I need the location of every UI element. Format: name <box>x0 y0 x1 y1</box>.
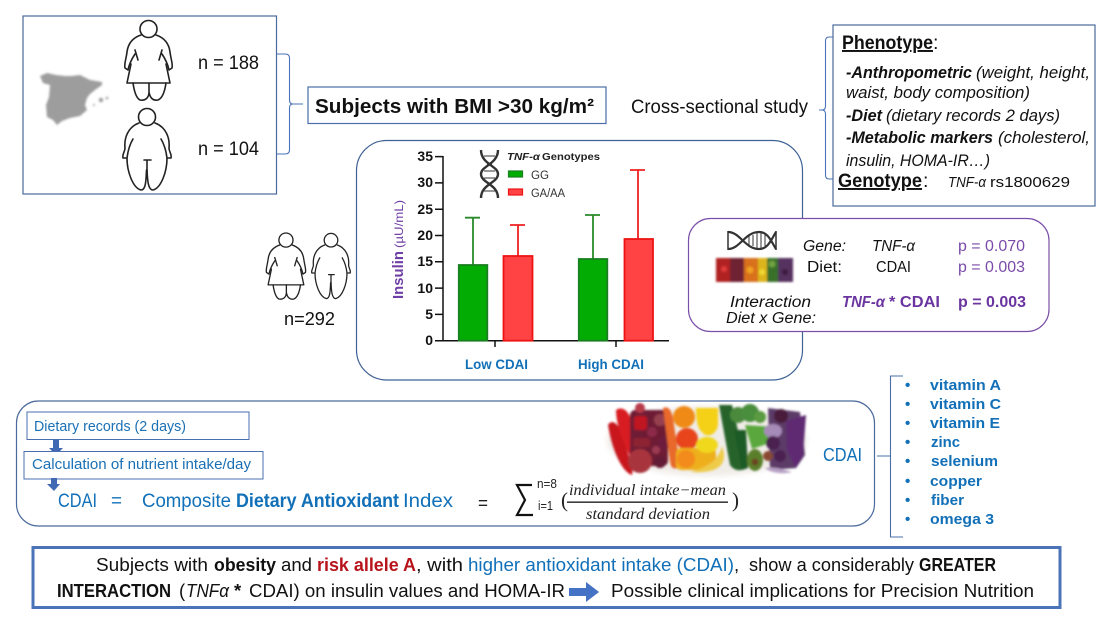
row: diet <box>807 259 1025 276</box>
list: antioxidant components: vitamin E <box>930 415 1000 432</box>
box: dietary records: Dietary records (2 days) <box>34 419 186 435</box>
text: anthropometric: -Anthropometric <box>846 64 972 82</box>
list: antioxidant components: • <box>905 473 910 490</box>
text: CDAI definition: Composite <box>142 490 231 512</box>
label: CDAI: CDAI <box>823 445 862 465</box>
box: subjects with BMI over 30: Subjects with BMI >30 kg/m² <box>315 95 594 118</box>
panel: phenotype and genotype: : <box>933 32 938 54</box>
panel: CDAI calculation <box>16 401 874 526</box>
text: conclusion line 1: higher antioxidant intake (CDAI) <box>468 554 734 575</box>
text: conclusion line 2: ( <box>179 580 186 601</box>
bracket: population to subjects <box>277 54 303 154</box>
text: anthropometric: -Metabolic markers <box>846 129 993 147</box>
box: nutrient intake calculation: Calculation of nutrient intake/day <box>32 457 252 473</box>
formula: ) <box>732 488 739 512</box>
arrow: calculation to CDAI <box>47 478 60 491</box>
y axis with ticks: 15 <box>417 253 433 269</box>
row: interaction <box>726 294 1026 327</box>
box: dietary records <box>27 412 249 440</box>
text: conclusion line 2: * <box>234 580 242 601</box>
x axis labels <box>465 356 644 372</box>
text: conclusion line 1 <box>96 554 996 575</box>
formula <box>478 477 739 523</box>
list: antioxidant components: vitamin C <box>930 396 1001 413</box>
row: interaction: TNF-α <box>842 294 886 311</box>
text: conclusion line 2 <box>57 580 1034 601</box>
arrow: records to calculation <box>49 440 63 455</box>
list: antioxidant components <box>905 377 1001 528</box>
text: anthropometric <box>846 64 1090 170</box>
y axis with ticks: 35 <box>417 148 433 164</box>
row: interaction: Interaction <box>730 294 811 311</box>
list: antioxidant components: • <box>905 453 910 470</box>
row: gene: p = 0.070 <box>958 238 1025 255</box>
icon: horizontal DNA <box>728 231 776 250</box>
list: antioxidant components: zinc <box>931 434 960 451</box>
x axis labels: Low CDAI <box>465 356 528 372</box>
text: anthropometric: insulin, HOMA-IR…) <box>846 152 990 170</box>
text: conclusion line 2: TNFα <box>186 580 229 601</box>
text: conclusion line 1: Subjects with <box>96 554 208 575</box>
text: CDAI definition: CDAI <box>58 490 97 512</box>
row: interaction: p = 0.003 <box>958 294 1026 311</box>
list: antioxidant components: fiber <box>931 492 964 509</box>
legend <box>507 151 600 200</box>
text: CDAI definition <box>58 490 453 512</box>
panel: phenotype and genotype: : <box>923 170 928 192</box>
text: CDAI definition: Dietary Antioxidant <box>236 490 399 512</box>
row: gene: Gene: <box>803 238 846 255</box>
text: TNF-alpha SNP <box>948 174 1070 191</box>
text: conclusion line 1: , <box>734 554 739 575</box>
box: nutrient intake calculation <box>24 452 263 479</box>
text: anthropometric: waist, body composition) <box>846 84 1030 102</box>
text: CDAI definition: = <box>111 490 122 512</box>
list: antioxidant components: • <box>905 511 910 528</box>
text: TNF-alpha SNP: TNF-α <box>948 174 986 191</box>
panel: insulin bar chart <box>356 140 802 380</box>
text: study type: Cross-sectional study <box>631 97 808 118</box>
row: gene: TNF-α <box>872 238 916 255</box>
y axis with ticks: 10 <box>417 280 433 296</box>
bracket: study to phenotype and genotype <box>819 37 838 179</box>
legend: Genotypes <box>542 151 600 163</box>
formula: n=8 <box>537 477 557 491</box>
heading: phenotype: Phenotype <box>842 32 933 54</box>
legend: TNF-α <box>507 151 541 163</box>
bracket: CDAI components <box>877 376 903 537</box>
icon: woman with obesity <box>125 20 172 100</box>
legend: GA/AA <box>531 188 565 200</box>
formula: = <box>478 493 488 513</box>
box: subjects with BMI over 30 <box>308 87 606 124</box>
text: anthropometric: (cholesterol, <box>998 129 1090 147</box>
list: antioxidant components: vitamin A <box>930 377 1001 394</box>
icon: map of Spain <box>40 73 108 125</box>
row: diet: CDAI <box>876 259 911 276</box>
y axis with ticks: 0 <box>425 332 433 348</box>
text: conclusion line 2: INTERACTION <box>57 580 171 601</box>
y axis label <box>390 200 407 299</box>
text: conclusion line 1: show a considerably <box>749 554 915 575</box>
y axis label: Insulin <box>390 251 407 299</box>
panel: gene-diet interaction statistics <box>688 218 1049 332</box>
icon: DNA helix <box>481 150 498 198</box>
row: diet: p = 0.003 <box>958 259 1025 276</box>
icon: food strip <box>716 258 793 282</box>
text: conclusion line 1: GREATER <box>919 554 996 575</box>
text: anthropometric: (dietary records 2 days) <box>886 107 1060 125</box>
y axis with ticks <box>417 148 669 348</box>
list: antioxidant components: • <box>905 377 910 394</box>
text: conclusion line 2: Possible clinical implications for Precision Nutrition <box>611 580 1034 601</box>
panel: study population <box>23 16 276 194</box>
panel: phenotype and genotype <box>833 25 1095 206</box>
row: gene <box>803 238 1025 255</box>
icon: man with obesity <box>123 108 171 190</box>
text: CDAI definition: Index <box>403 490 453 512</box>
panel: conclusion <box>33 548 1060 608</box>
text: conclusion line 1: , with <box>416 554 463 575</box>
list: antioxidant components: • <box>905 434 910 451</box>
text: conclusion line 2: CDAI) on insulin values and HOMA-IR <box>249 580 565 601</box>
row: diet: Diet: <box>807 259 842 276</box>
row: interaction: * CDAI <box>889 294 940 311</box>
heading: genotype: Genotype <box>838 170 922 192</box>
text: TNF-alpha SNP: rs1800629 <box>990 174 1070 191</box>
bars: low CDAI <box>459 218 532 341</box>
legend: GG <box>531 170 549 182</box>
label: men count: n = 104 <box>198 138 259 160</box>
y axis with ticks: 30 <box>417 174 433 190</box>
list: antioxidant components: omega 3 <box>930 511 994 528</box>
label: total subjects: n=292 <box>284 309 335 329</box>
text: conclusion line 1: obesity <box>214 554 277 575</box>
formula: i=1 <box>538 499 553 513</box>
text: anthropometric: -Diet <box>846 107 883 125</box>
formula: standard deviation <box>586 506 710 523</box>
bars: high CDAI <box>579 170 653 341</box>
x axis labels: High CDAI <box>578 356 644 372</box>
text: conclusion line 1: risk allele A <box>317 554 416 575</box>
list: antioxidant components: • <box>905 492 910 509</box>
y axis with ticks: 20 <box>417 227 433 243</box>
formula: individual intake−mean <box>569 482 726 499</box>
formula: ( <box>561 488 568 512</box>
list: antioxidant components: selenium <box>931 453 998 470</box>
icons: pair of subjects <box>266 233 350 299</box>
y axis with ticks: 25 <box>417 201 433 217</box>
list: antioxidant components: • <box>905 415 910 432</box>
label: women count: n = 188 <box>198 52 259 74</box>
arrow: conclusion implication <box>569 582 599 602</box>
y axis label: (µU/mL) <box>392 200 406 248</box>
text: conclusion line 1: and <box>281 554 312 575</box>
y axis with ticks: 5 <box>425 306 433 322</box>
text: anthropometric: (weight, height, <box>976 64 1090 82</box>
list: antioxidant components: • <box>905 396 910 413</box>
list: antioxidant components: copper <box>930 473 982 490</box>
row: interaction: Diet x Gene: <box>726 310 816 327</box>
image: fruits and vegetables <box>607 403 807 476</box>
